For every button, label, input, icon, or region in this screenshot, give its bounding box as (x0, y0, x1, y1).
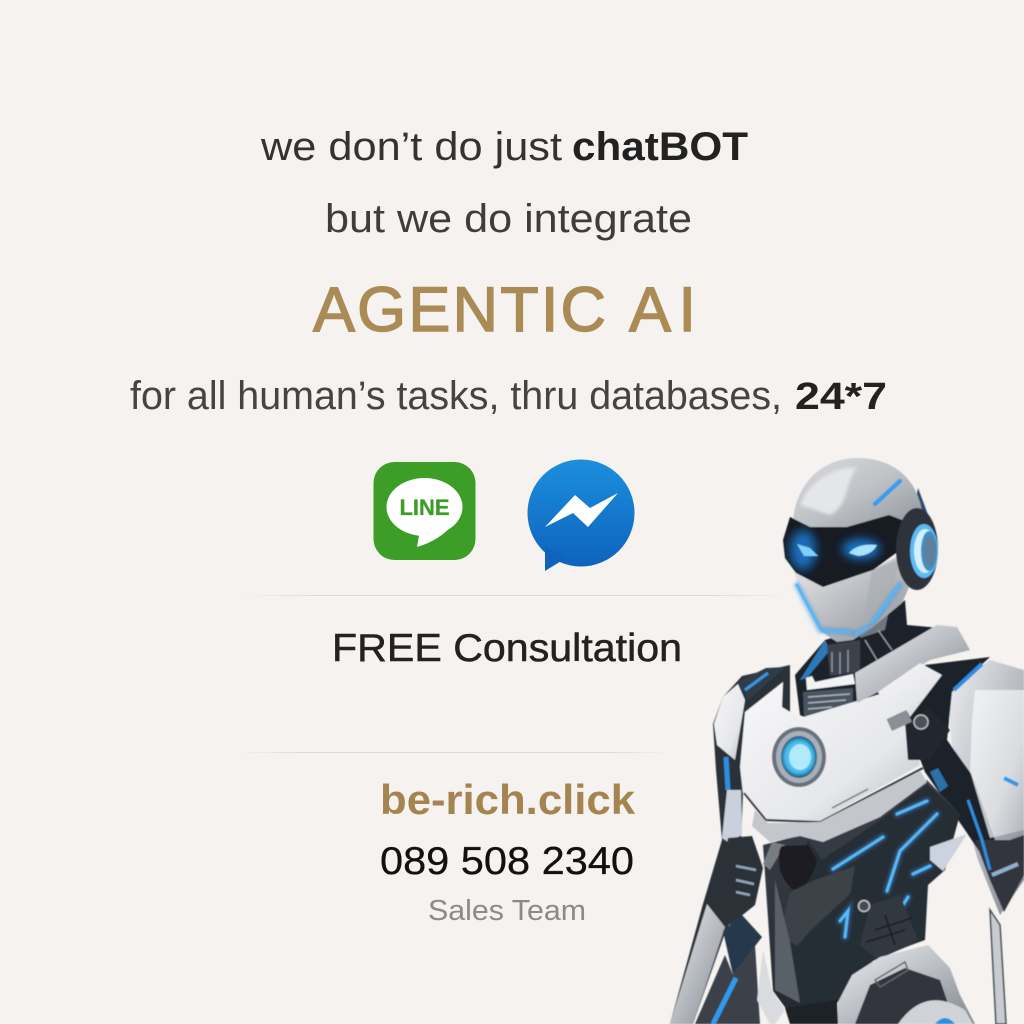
subheading: tasks line: 24*7 (795, 376, 887, 418)
subheading: tasks line: for all human’s tasks, thru databases, (130, 374, 782, 418)
heading: line two: but we do integrate (325, 197, 692, 241)
shoulder mechanics (886, 708, 950, 760)
robot right arm (905, 657, 1024, 1024)
divider (240, 595, 790, 596)
visor glow (790, 530, 880, 570)
icon: LINE: LINE (400, 495, 450, 520)
contact: phone: 089 508 2340 (380, 840, 634, 883)
robot left arm (670, 665, 790, 1024)
robot hip (757, 945, 975, 1024)
arc reactor (772, 727, 826, 787)
dome (793, 458, 922, 528)
side vents (930, 768, 948, 792)
chest plate (740, 682, 920, 821)
icon: Messenger (528, 460, 634, 571)
illustration: robot (670, 458, 1024, 1024)
heading: line one (260, 125, 748, 169)
contact: team label: Sales Team (428, 895, 586, 927)
icon: LINE (374, 462, 476, 560)
heading: AGENTIC AI: AGENTIC (313, 275, 606, 345)
infographic canvas (130, 131, 1024, 1024)
chin light strips (797, 585, 900, 634)
collar plate (855, 625, 970, 703)
heading: line one: we don’t do just (260, 125, 562, 169)
lower chest plate (752, 771, 927, 842)
contact: website: be-rich.click (380, 776, 636, 823)
robot neck (795, 600, 940, 720)
mesh panel (779, 845, 817, 890)
waist coils (860, 895, 918, 960)
ear module (896, 508, 938, 590)
dome light strip (875, 481, 900, 504)
back of helmet (912, 488, 930, 520)
robot torso (740, 682, 967, 1010)
divider (240, 752, 670, 753)
heading: AGENTIC AI: AI (629, 275, 696, 345)
blue glow lines (833, 801, 937, 937)
faceplate (793, 560, 910, 642)
robot helmet (783, 458, 938, 642)
heading: line one: chatBOT (572, 125, 748, 169)
call to action: FREE Consultation: FREE Consultation (332, 627, 682, 670)
visor (783, 515, 902, 587)
shoulder joint plate (878, 663, 942, 717)
